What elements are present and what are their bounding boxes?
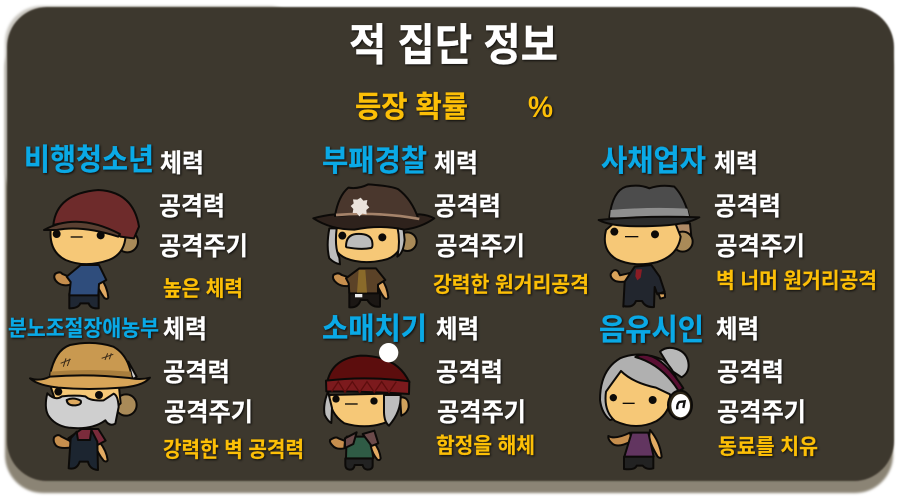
icon: gangster in fedora xyxy=(599,186,699,307)
stats xyxy=(163,316,304,462)
panel: bard xyxy=(599,314,818,469)
stats: 체력 xyxy=(434,150,478,178)
stats xyxy=(714,150,877,293)
panel: juvenile delinquent xyxy=(24,144,248,308)
icon: bard with headphones xyxy=(600,348,692,469)
icon: thief with beanie xyxy=(324,343,409,470)
name: 비행청소년 xyxy=(24,144,154,177)
stats: 높은 체력 xyxy=(163,277,243,301)
title: 적 집단 정보 xyxy=(349,21,558,70)
icon: farmer with straw hat xyxy=(30,343,150,470)
stats: 공격주기 xyxy=(164,399,253,427)
stats: 강력한 원거리공격 xyxy=(433,273,589,297)
stats: 벽 너머 원거리공격 xyxy=(716,269,877,293)
panel: angry farmer xyxy=(8,316,304,470)
stats: 공격주기 xyxy=(717,399,806,427)
stats: 함정을 해체 xyxy=(436,434,535,458)
stats xyxy=(716,316,818,459)
stats: 공격주기 xyxy=(435,233,525,261)
stats: 공격력 xyxy=(717,359,784,387)
panel: loan shark xyxy=(599,145,877,307)
stats xyxy=(433,150,589,297)
stats: 체력 xyxy=(716,316,759,344)
panel: pickpocket xyxy=(322,313,535,470)
stats: 동료를 치유 xyxy=(718,435,818,459)
appearance probability: % xyxy=(528,91,553,124)
appearance probability xyxy=(355,91,553,124)
name: 소매치기 xyxy=(322,313,427,346)
stats: 공격주기 xyxy=(715,233,805,261)
icon: boy with cap xyxy=(44,190,139,308)
panel: corrupt police officer xyxy=(313,145,589,307)
stats: 공격주기 xyxy=(159,233,248,261)
stats: 공격력 xyxy=(436,359,503,387)
stats: 체력 xyxy=(163,316,207,344)
stats: 강력한 벽 공격력 xyxy=(163,438,304,462)
stats: 체력 xyxy=(714,150,758,178)
name: 분노조절장애농부 xyxy=(8,316,159,341)
appearance probability: 등장 확률 xyxy=(355,91,468,124)
stats: 체력 xyxy=(436,316,479,344)
name: 음유시인 xyxy=(599,314,704,347)
stats xyxy=(436,316,535,458)
icon: sheriff xyxy=(313,184,434,307)
stats: 공격력 xyxy=(434,193,501,221)
stats: 공격력 xyxy=(159,193,225,221)
stats: 체력 xyxy=(160,150,204,178)
stats xyxy=(159,150,248,301)
stats: 공격주기 xyxy=(437,399,526,427)
name: 부패경찰 xyxy=(322,145,427,178)
stats: 공격력 xyxy=(163,359,230,387)
name: 사채업자 xyxy=(601,145,706,178)
stats: 공격력 xyxy=(714,193,781,221)
